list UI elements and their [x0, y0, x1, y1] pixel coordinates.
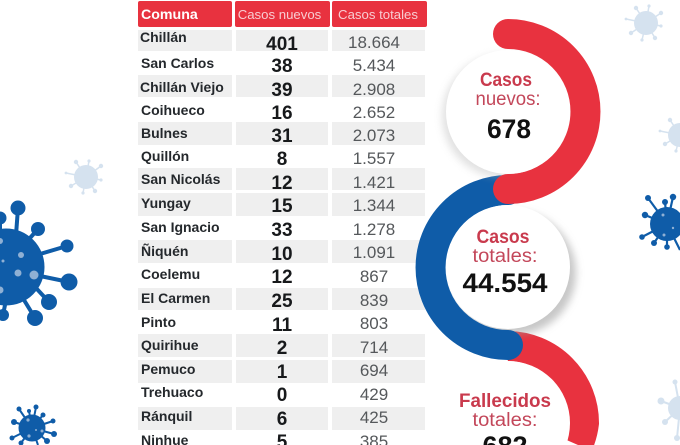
icon: large virus left — [0, 200, 78, 326]
total cases column: 1.557 — [353, 149, 395, 168]
commune names: Ránquil — [141, 408, 192, 424]
new cases column: 1 — [277, 362, 288, 383]
commune names: San Ignacio — [141, 219, 220, 235]
casos nuevos text: 678 — [487, 114, 531, 144]
new cases column: 10 — [271, 244, 293, 265]
new cases column: 39 — [271, 80, 293, 101]
panel: fallecidos totales ring — [446, 346, 584, 445]
table header: Casos totales — [338, 7, 418, 22]
casos totales text: 44.554 — [462, 268, 548, 298]
icon: pale virus bottom right — [658, 380, 680, 441]
panel: casos totales ring — [431, 190, 576, 345]
new cases column: 8 — [277, 149, 287, 170]
total cases column: 2.073 — [353, 126, 395, 145]
new cases column: 12 — [271, 267, 293, 288]
icon: small virus bottom left — [10, 404, 57, 445]
commune names: Trehuaco — [141, 384, 203, 400]
table header: Comuna — [141, 7, 198, 23]
commune names: Yungay — [141, 195, 191, 211]
icon: blue virus right — [639, 194, 680, 250]
new cases column: 0 — [277, 385, 287, 406]
total cases column: 2.908 — [353, 80, 395, 99]
panel: casos nuevos ring — [442, 34, 585, 189]
commune names: Pemuco — [141, 361, 195, 377]
total cases column: 839 — [360, 291, 388, 310]
total cases column: 429 — [360, 385, 388, 404]
commune names: Coelemu — [141, 266, 200, 282]
fallecidos text: totales: — [472, 410, 538, 431]
casos nuevos text — [476, 70, 540, 144]
total cases column: 1.421 — [353, 173, 395, 192]
commune names — [140, 29, 224, 445]
new cases column: 25 — [271, 291, 293, 312]
commune names: Bulnes — [141, 125, 188, 141]
casos totales text — [462, 227, 548, 298]
icon: pale virus right — [659, 118, 680, 153]
new cases column: 33 — [271, 220, 293, 241]
commune names: Coihueco — [141, 102, 205, 118]
fallecidos text — [459, 391, 551, 445]
table header: Casos nuevos — [238, 7, 322, 22]
table header — [138, 1, 427, 27]
commune names: Quirihue — [141, 337, 199, 353]
commune names: Pinto — [141, 314, 176, 330]
total cases column: 1.091 — [353, 243, 395, 262]
total cases column: 425 — [360, 408, 388, 427]
casos nuevos text: nuevos: — [476, 89, 540, 110]
total cases column: 803 — [360, 314, 388, 333]
table: cases by commune — [138, 1, 427, 445]
total cases column: 2.652 — [353, 103, 395, 122]
total cases column: 714 — [360, 338, 388, 357]
commune names: Chillán — [140, 29, 187, 45]
new cases column: 2 — [277, 338, 287, 359]
icon: pale virus left — [65, 159, 103, 195]
table row stripes — [138, 30, 425, 430]
fallecidos text: Fallecidos — [459, 391, 551, 412]
new cases column: 401 — [266, 34, 298, 55]
new cases column: 11 — [272, 315, 292, 336]
total cases column: 5.434 — [353, 56, 395, 75]
total cases column: 1.344 — [353, 196, 395, 215]
icon: pale virus top right — [625, 4, 663, 42]
new cases column: 16 — [271, 103, 293, 124]
new cases column: 38 — [271, 56, 293, 77]
new cases column: 15 — [271, 196, 293, 217]
commune names: El Carmen — [141, 290, 210, 306]
new cases column: 31 — [271, 126, 293, 147]
commune names: Ñiquén — [141, 242, 188, 259]
commune names: Chillán Viejo — [140, 79, 224, 95]
total cases column — [348, 33, 400, 445]
new cases column — [266, 34, 298, 445]
total cases column: 867 — [360, 267, 388, 286]
total cases column: 694 — [360, 361, 388, 380]
commune names: San Carlos — [141, 55, 214, 71]
commune names: Quillón — [141, 148, 189, 164]
total cases column: 1.278 — [353, 220, 395, 239]
casos totales text: Casos — [476, 227, 530, 248]
new cases column: 12 — [271, 173, 293, 194]
casos nuevos text: Casos — [480, 70, 532, 91]
commune names: San Nicolás — [141, 171, 221, 187]
casos totales text: totales: — [472, 246, 538, 267]
new cases column: 6 — [277, 409, 287, 430]
total cases column: 18.664 — [348, 33, 400, 52]
